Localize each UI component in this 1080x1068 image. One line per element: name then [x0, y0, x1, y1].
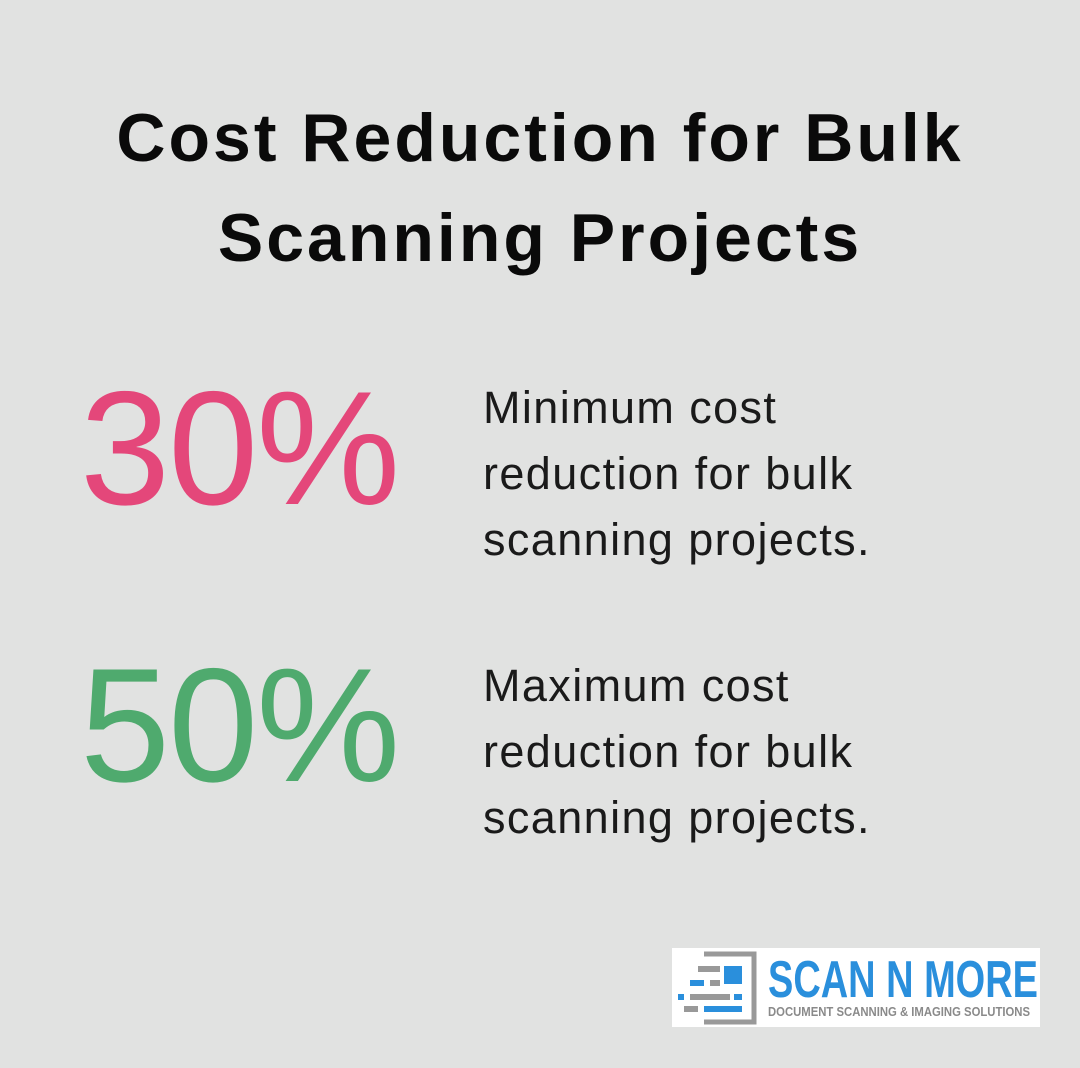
stat: 50%: 50%	[80, 635, 398, 816]
text: maximum: reduction for bulk	[483, 726, 853, 777]
text: maximum	[483, 660, 871, 843]
icon: scanner	[678, 952, 756, 1024]
text: maximum: Maximum cost	[483, 660, 790, 711]
text: minimum: Minimum cost	[483, 382, 777, 433]
logo	[672, 948, 1040, 1027]
title	[116, 100, 964, 276]
text: minimum: scanning projects.	[483, 514, 871, 565]
title: Scanning Projects	[218, 200, 862, 276]
logo: DOCUMENT SCANNING & IMAGING SOLUTIONS	[768, 1004, 1030, 1019]
title: Cost Reduction for Bulk	[116, 100, 964, 176]
stat: 30%: 30%	[80, 358, 398, 539]
text: maximum: scanning projects.	[483, 792, 871, 843]
text: minimum	[483, 382, 871, 565]
text: minimum: reduction for bulk	[483, 448, 853, 499]
logo text: SCAN N MORE	[768, 951, 1038, 1009]
